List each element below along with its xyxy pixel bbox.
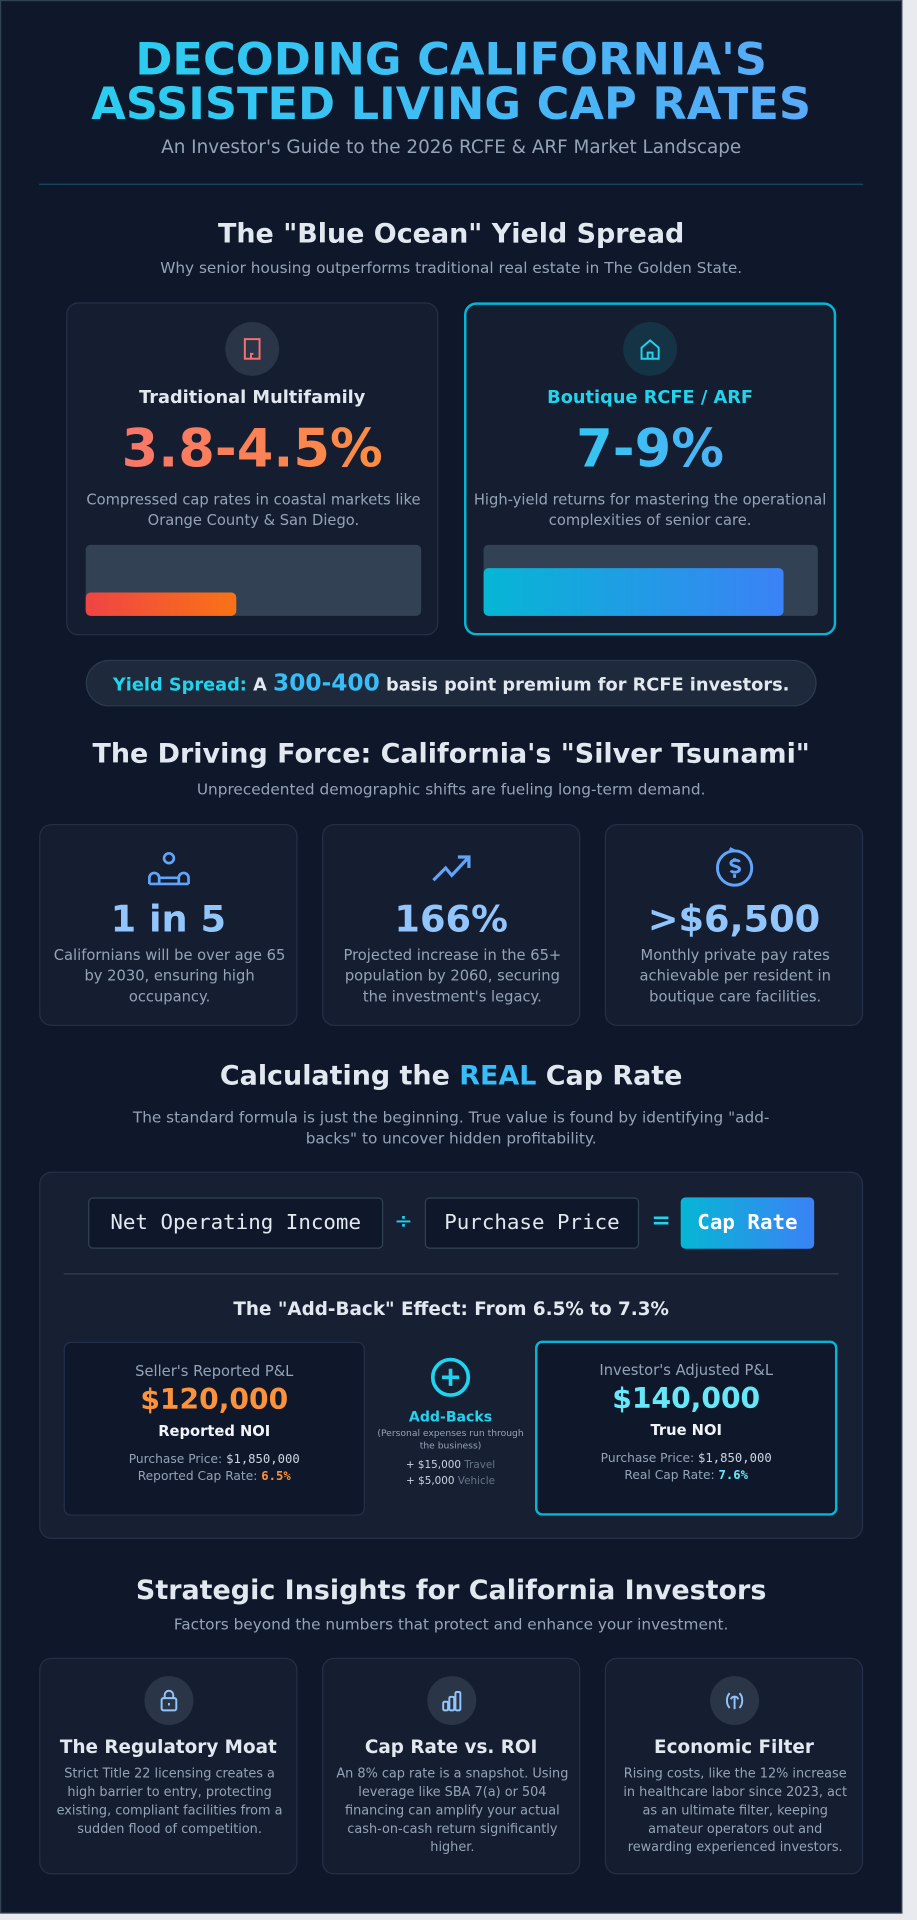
value: 7-9% bbox=[576, 419, 724, 480]
panel: formula bbox=[39, 1172, 863, 1539]
title: DECODING CALIFORNIA'S bbox=[135, 33, 767, 86]
title: ASSISTED LIVING CAP RATES bbox=[91, 77, 811, 130]
heading: driving force: The Driving Force: California's "Silver Tsunami" bbox=[92, 739, 810, 770]
title bbox=[0, 38, 902, 126]
text: Californians will be over age 65 by 2030, ensuring high occupancy. bbox=[54, 946, 285, 1005]
heading: blue ocean: The "Blue Ocean" Yield Spread bbox=[218, 219, 684, 250]
icon: chart bbox=[427, 1676, 476, 1725]
box: seller: Reported Cap Rate: 6.5% bbox=[138, 1470, 291, 1484]
icon: building bbox=[225, 322, 279, 376]
icon: house bbox=[623, 322, 677, 376]
panel: traditional multifamily bbox=[66, 302, 438, 635]
insight: cap rate vs roi bbox=[322, 1658, 580, 1874]
value bbox=[466, 419, 834, 480]
box: investor: True NOI bbox=[650, 1421, 722, 1439]
text: An 8% cap rate is a snapshot. Using leverage like SBA 7(a) or 504 financing can amplify your actual cash-on-cash return significantly higher. bbox=[336, 1767, 568, 1855]
stat card: 166% bbox=[322, 824, 580, 1026]
insight: economic filter bbox=[605, 1658, 863, 1874]
heading: strategic insights: Strategic Insights for California Investors bbox=[136, 1576, 766, 1606]
callout: yield spread: Yield Spread: A 300-400 basis point premium for RCFE investors. bbox=[113, 670, 789, 697]
stat card: 6500 bbox=[605, 824, 863, 1026]
text: Monthly private pay rates achievable per resident in boutique care facilities. bbox=[639, 946, 831, 1005]
bar bbox=[86, 545, 421, 616]
icon: filter bbox=[709, 1676, 758, 1725]
formula: NOI bbox=[88, 1197, 383, 1249]
title: Cap Rate vs. ROI bbox=[365, 1736, 537, 1758]
panel: boutique rcfe bbox=[464, 302, 836, 635]
label: Boutique RCFE / ARF bbox=[547, 388, 753, 408]
operator equals: = bbox=[651, 1207, 671, 1234]
icon: plus bbox=[430, 1358, 470, 1397]
box: investor: Real Cap Rate: 7.6% bbox=[624, 1469, 748, 1483]
bar bbox=[484, 545, 818, 616]
subheading: Unprecedented demographic shifts are fueling long-term demand. bbox=[197, 780, 705, 798]
insight: regulatory moat bbox=[39, 1658, 298, 1874]
value: 1 in 5 bbox=[111, 899, 226, 941]
text: Strict Title 22 licensing creates a high barrier to entry, protecting existing, compliant facilities from a sudden flood of competition. bbox=[57, 1767, 283, 1836]
box: investor: Investor's Adjusted P&L bbox=[599, 1361, 773, 1379]
formula: price bbox=[425, 1197, 639, 1249]
label: Traditional Multifamily bbox=[139, 388, 365, 408]
box: seller: Reported NOI bbox=[158, 1423, 270, 1440]
formula: price: Purchase Price bbox=[444, 1211, 620, 1235]
box: seller: $120,000 bbox=[140, 1385, 288, 1417]
text: Projected increase in the 65+ population by 2060, securing the investment's legacy. bbox=[343, 946, 561, 1005]
value: 166% bbox=[394, 899, 508, 941]
description: High-yield returns for mastering the operational complexities of senior care. bbox=[474, 491, 826, 529]
operator divide: ÷ bbox=[394, 1208, 413, 1234]
subheading: Why senior housing outperforms traditional real estate in The Golden State. bbox=[160, 258, 742, 277]
box: investor: $140,000 bbox=[612, 1383, 760, 1415]
icon: dollar bbox=[716, 847, 754, 887]
title: The Regulatory Moat bbox=[60, 1736, 277, 1758]
formula: NOI: Net Operating Income bbox=[110, 1211, 361, 1235]
callout: yield spread bbox=[86, 660, 817, 706]
add-backs bbox=[377, 1358, 524, 1488]
stat card: 1 in 5 bbox=[39, 824, 298, 1026]
add-backs: + $15,000 Travel bbox=[406, 1459, 495, 1472]
title: Economic Filter bbox=[654, 1736, 814, 1758]
subheading: Factors beyond the numbers that protect and enhance your investment. bbox=[174, 1615, 728, 1633]
box: seller: Purchase Price: $1,850,000 bbox=[129, 1453, 300, 1467]
formula: cap rate: Cap Rate bbox=[697, 1211, 798, 1235]
box: seller bbox=[64, 1342, 365, 1516]
text: Rising costs, like the 12% increase in healthcare labor since 2023, act as an ultimate filter, keeping amateur operators out and rewarding experienced investors. bbox=[623, 1767, 847, 1855]
add-backs: (Personal expenses run through the business) bbox=[377, 1428, 524, 1451]
icon: lock bbox=[144, 1676, 193, 1725]
description: Compressed cap rates in coastal markets like Orange County & San Diego. bbox=[86, 491, 421, 529]
subtitle: An Investor's Guide to the 2026 RCFE & ARF Market Landscape bbox=[161, 136, 741, 158]
box: investor bbox=[535, 1341, 837, 1516]
subheading: The standard formula is just the beginning. True value is found by identifying "add-backs" to uncover hidden profitability. bbox=[133, 1108, 769, 1147]
box: seller: Seller's Reported P&L bbox=[135, 1363, 293, 1380]
formula: cap rate bbox=[681, 1197, 814, 1249]
add-backs: Add-Backs bbox=[409, 1408, 492, 1425]
value: 3.8-4.5% bbox=[122, 419, 383, 480]
icon: people bbox=[148, 852, 190, 886]
value: >$6,500 bbox=[648, 899, 820, 941]
box: investor: Purchase Price: $1,850,000 bbox=[601, 1452, 772, 1465]
heading: real cap rate: Calculating the REAL Cap Rate bbox=[220, 1061, 682, 1092]
icon: trend bbox=[432, 855, 470, 882]
heading: add-back: The "Add-Back" Effect: From 6.5% to 7.3% bbox=[233, 1298, 669, 1320]
add-backs: + $5,000 Vehicle bbox=[406, 1475, 495, 1488]
